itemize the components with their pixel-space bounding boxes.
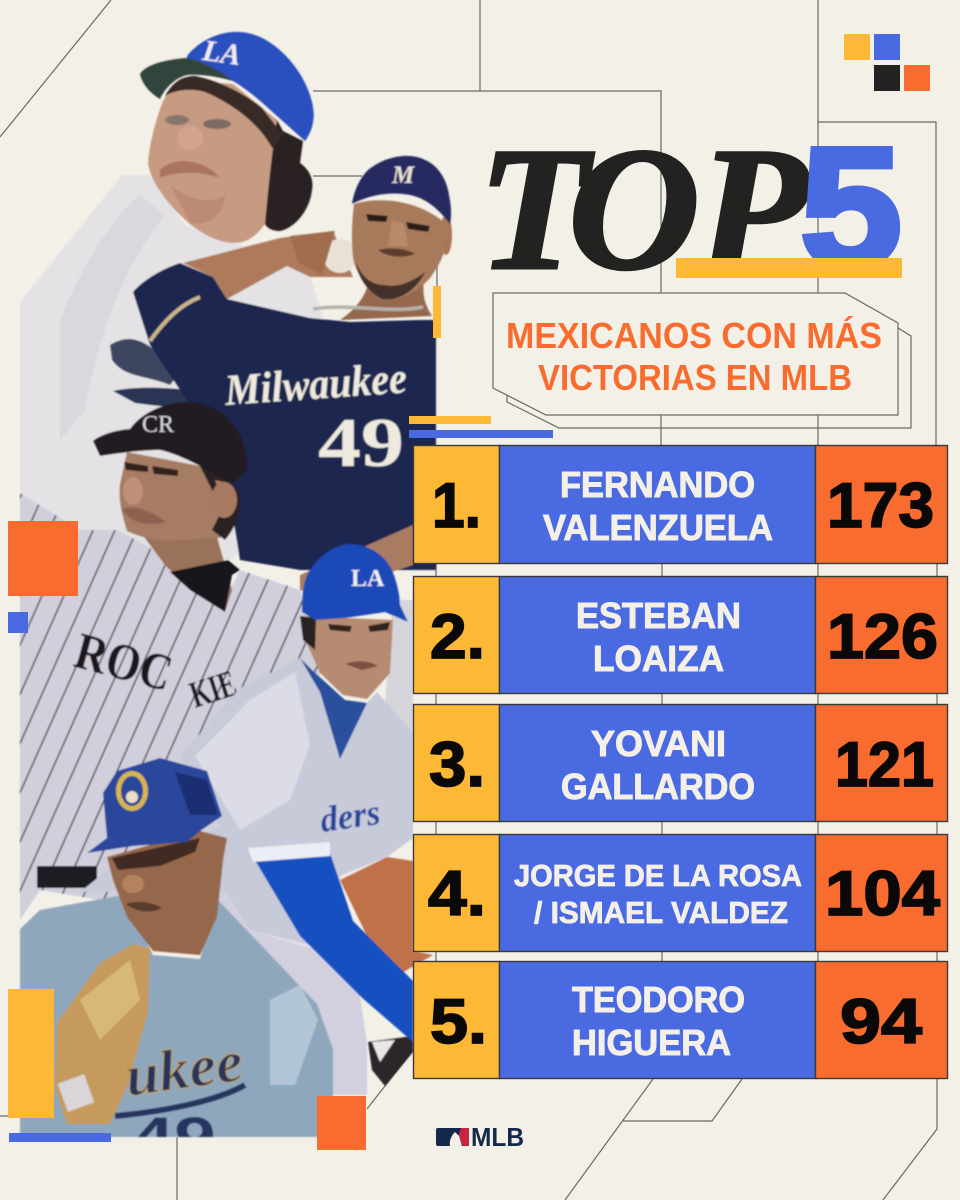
Brewers cap logo [116,771,148,811]
row 2: LOAIZA [593,638,724,679]
player: Ismael Valdez [80,544,433,1095]
Rockies jersey lettering: ROC [69,623,178,703]
row 3: 121 [835,730,934,800]
player collage [20,32,452,1168]
row 3: GALLARDO [561,766,755,807]
row 4: 4. [428,859,486,929]
title word: TOP [478,112,810,307]
row 4: / ISMAEL VALDEZ [534,895,788,930]
title underline [676,258,902,278]
row 1: VALENZUELA [543,507,773,548]
row 4: JORGE DE LA ROSA [514,858,802,893]
row 3 [414,704,948,822]
row 1: FERNANDO [560,464,755,505]
row 1: 1. [432,471,481,541]
row 5: 94 [840,987,922,1057]
LA cap logo: LA [200,34,243,72]
player: Teodoro Higuera [20,758,333,1168]
row 4: 104 [825,859,940,929]
M cap logo: M [391,162,415,189]
subtitle panel [493,293,911,428]
title word: TOP: P [697,112,810,307]
row 2: ESTEBAN [576,595,741,636]
ranking table [414,446,948,1078]
jersey number 49: 49 [318,405,404,482]
row 3: YOVANI [591,723,726,764]
row 2 [414,576,948,694]
LA cap logo: LA [351,566,385,592]
subtitle line 2: VICTORIAS EN MLB [538,357,852,398]
row 2: 2. [430,602,485,672]
row 5 [414,962,948,1078]
Milwaukee jersey script: Milwaukee [222,353,408,415]
accent bars above table [409,416,553,438]
CR cap logo: CR [142,412,174,438]
title word: TOP: O [568,112,700,307]
row 2: 126 [827,602,938,672]
MLB logo: MLB [471,1122,524,1152]
row 1 [414,446,948,564]
subtitle line 1: MEXICANOS CON MÁS [506,315,882,356]
MLB logo [436,1122,524,1152]
player: Esteban Loaiza [133,156,452,595]
title word: TOP: T [478,112,595,307]
title number: 5: 5 [800,113,902,303]
player: Jorge de la Rosa [20,402,320,920]
Rockies jersey lettering, second part: KIE [185,662,242,717]
title [478,112,902,307]
jersey number, clipped: 49 [132,1105,216,1168]
row 4 [414,834,948,952]
decorative squares, top right [844,34,930,91]
Milwaukee jersey script: ukee [121,1028,247,1109]
row 1: 173 [827,471,934,541]
row 5: TEODORO [572,979,745,1020]
decorative squares, left [8,286,441,1150]
Dodgers jersey script: ders [318,792,383,840]
player: Fernando Valenzuela [20,32,330,560]
row 3: 3. [429,730,485,800]
row 5: HIGUERA [572,1022,731,1063]
row 5: 5. [430,987,487,1057]
